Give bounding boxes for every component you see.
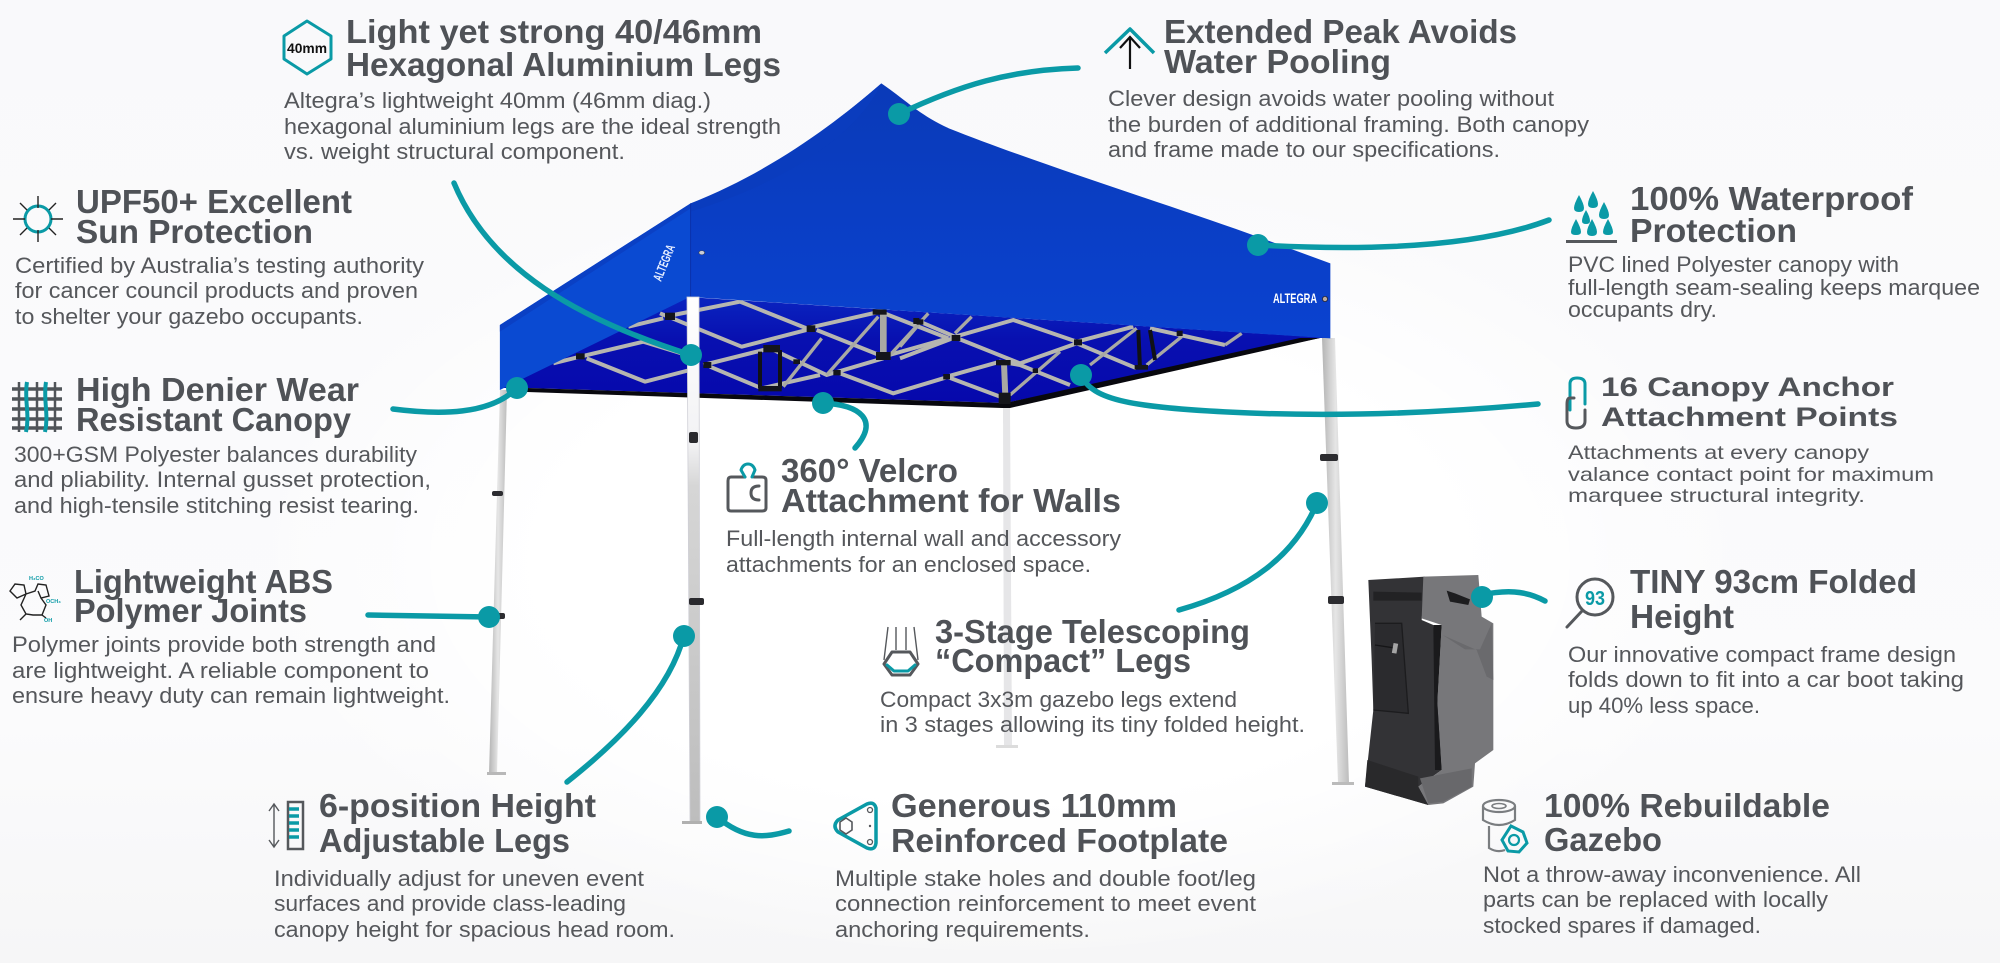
icon: 40mm hexagon bbox=[284, 21, 331, 74]
heading bbox=[1630, 563, 1917, 635]
body text: hexagonal aluminium legs are the ideal strength bbox=[284, 114, 781, 139]
body text bbox=[1108, 86, 1589, 162]
heading: Adjustable Legs bbox=[319, 822, 570, 859]
icon: bolt and nut bbox=[1483, 800, 1527, 852]
body text: occupants dry. bbox=[1568, 297, 1717, 322]
icon: footplate bbox=[835, 803, 876, 849]
heading: High Denier Wear bbox=[76, 371, 359, 408]
heading: 360° Velcro bbox=[781, 452, 958, 489]
heading: Polymer Joints bbox=[74, 592, 307, 629]
icon: 40mm hexagon: 40mm bbox=[287, 40, 327, 56]
body text bbox=[274, 866, 675, 942]
panel: polymer joints bbox=[10, 563, 450, 708]
panel: high denier canopy bbox=[12, 371, 431, 518]
icon: peak and arrow bbox=[1105, 29, 1154, 69]
eyelet right bbox=[1322, 296, 1328, 302]
heading: Water Pooling bbox=[1164, 43, 1391, 80]
peak shading bbox=[691, 83, 881, 212]
callout: velcro bbox=[812, 392, 866, 448]
body text bbox=[1483, 862, 1861, 938]
body text: 300+GSM Polyester balances durability bbox=[14, 442, 417, 467]
bag side pocket bbox=[1443, 623, 1493, 680]
aluminium scissor frame, left half bbox=[553, 302, 950, 393]
body text bbox=[880, 687, 1305, 737]
body text: are lightweight. A reliable component to bbox=[12, 658, 429, 683]
body text: connection reinforcement to meet event bbox=[835, 891, 1256, 916]
heading: Height bbox=[1630, 598, 1734, 635]
icon: woven fabric bbox=[12, 382, 62, 432]
gazebo front leg bbox=[682, 297, 704, 824]
heading bbox=[74, 563, 333, 629]
bag zip bbox=[1375, 645, 1397, 648]
body text: stocked spares if damaged. bbox=[1483, 913, 1761, 938]
icon: molecule: OH bbox=[44, 618, 52, 624]
icon: chain link bbox=[1567, 378, 1585, 428]
panel: rebuildable bbox=[1483, 787, 1861, 938]
body text: surfaces and provide class-leading bbox=[274, 891, 626, 916]
body text: the burden of additional framing. Both canopy bbox=[1108, 112, 1589, 137]
icon: molecule bbox=[10, 576, 61, 624]
body text: canopy height for spacious head room. bbox=[274, 917, 675, 942]
heading bbox=[781, 452, 1121, 519]
heading: Reinforced Footplate bbox=[891, 822, 1228, 859]
body text: attachments for an enclosed space. bbox=[726, 552, 1091, 577]
body text: vs. weight structural component. bbox=[284, 139, 625, 164]
body text: Polymer joints provide both strength and bbox=[12, 632, 436, 657]
body text: folds down to fit into a car boot taking bbox=[1568, 667, 1964, 692]
callout: folded height bbox=[1471, 586, 1545, 608]
heading: Light yet strong 40/46mm bbox=[346, 13, 762, 50]
body text: for cancer council products and proven bbox=[15, 278, 418, 303]
panel: waterproof bbox=[1566, 180, 1980, 322]
panel: footplate bbox=[835, 787, 1256, 942]
body text bbox=[726, 526, 1121, 577]
body text: in 3 stages allowing its tiny folded height. bbox=[880, 712, 1305, 737]
callout: footplate bbox=[706, 806, 789, 836]
heading: 100% Rebuildable bbox=[1544, 787, 1830, 824]
heading: Attachment for Walls bbox=[781, 482, 1121, 519]
panel: sun protection bbox=[13, 183, 424, 329]
panel: velcro bbox=[726, 452, 1121, 577]
icon: sun bbox=[13, 196, 63, 242]
heading: 16 Canopy Anchor bbox=[1601, 372, 1895, 402]
body text: and high-tensile stitching resist tearing. bbox=[14, 493, 419, 518]
icon: rain drops bbox=[1566, 191, 1617, 243]
heading bbox=[1630, 180, 1914, 249]
body text: Certified by Australia’s testing authority bbox=[15, 253, 424, 278]
heading bbox=[76, 371, 359, 438]
heading bbox=[1601, 372, 1898, 432]
heading bbox=[346, 13, 781, 83]
panel: canopy anchors bbox=[1567, 372, 1934, 507]
heading bbox=[1164, 13, 1517, 80]
heading: Hexagonal Aluminium Legs bbox=[346, 46, 781, 83]
body text: Compact 3x3m gazebo legs extend bbox=[880, 687, 1237, 712]
callout: peak bbox=[888, 68, 1078, 125]
heading: Resistant Canopy bbox=[76, 401, 352, 438]
left roof edge bbox=[500, 203, 691, 332]
body text: valance contact point for maximum bbox=[1568, 464, 1934, 486]
heading bbox=[891, 787, 1228, 859]
body text bbox=[1568, 252, 1980, 322]
callout: waterproof bbox=[1247, 220, 1549, 256]
callout: anchor points bbox=[1070, 364, 1538, 414]
gazebo canopy and frame bbox=[500, 83, 1330, 408]
corner seam bbox=[690, 203, 692, 297]
body text bbox=[835, 866, 1256, 942]
icon: magnifier 93 bbox=[1567, 579, 1613, 627]
body text bbox=[14, 442, 431, 518]
body text: full-length seam-sealing keeps marquee bbox=[1568, 275, 1980, 300]
heading: 6-position Height bbox=[319, 787, 596, 824]
body text: PVC lined Polyester canopy with bbox=[1568, 252, 1899, 277]
panel: height adjustable legs bbox=[269, 787, 675, 942]
body text: Full-length internal wall and accessory bbox=[726, 526, 1121, 551]
heading: TINY 93cm Folded bbox=[1630, 563, 1917, 600]
callout: height adjustable bbox=[567, 625, 695, 782]
body text bbox=[12, 632, 450, 708]
bag lower band bbox=[1365, 760, 1428, 805]
icon: telescoping leg bbox=[884, 627, 918, 675]
roof and valance bbox=[500, 83, 1330, 390]
body text: anchoring requirements. bbox=[835, 917, 1090, 942]
icon: magnifier 93: 93 bbox=[1585, 588, 1605, 610]
aluminium scissor frame, right half bbox=[900, 317, 1242, 404]
gazebo rear legs bbox=[487, 338, 1354, 785]
panel: hexagonal legs bbox=[284, 13, 781, 164]
panel: extended peak bbox=[1105, 13, 1589, 162]
icon: molecule: OCH₃ bbox=[46, 599, 61, 605]
panel: telescoping legs bbox=[880, 613, 1305, 737]
body text: ensure heavy duty can remain lightweight. bbox=[12, 683, 450, 708]
body text: and pliability. Internal gusset protection, bbox=[14, 467, 431, 492]
heading: Sun Protection bbox=[76, 213, 313, 250]
bag shadow stripe bbox=[1433, 625, 1442, 770]
bag pocket bbox=[1373, 623, 1408, 713]
icon: molecule: H₃CO bbox=[29, 576, 44, 582]
body text: Not a throw-away inconvenience. All bbox=[1483, 862, 1861, 887]
callout: polymer joints bbox=[368, 606, 500, 628]
body text bbox=[15, 253, 424, 329]
body text: Altegra’s lightweight 40mm (46mm diag.) bbox=[284, 88, 711, 113]
body text: marquee structural integrity. bbox=[1568, 485, 1865, 507]
heading: “Compact” Legs bbox=[935, 642, 1191, 679]
panel: folded height bbox=[1567, 563, 1964, 718]
heading: Extended Peak Avoids bbox=[1164, 13, 1517, 50]
eyelet left bbox=[699, 251, 705, 255]
body text: Clever design avoids water pooling without bbox=[1108, 86, 1554, 111]
left valance bbox=[500, 203, 691, 390]
canopy underside bbox=[500, 297, 1330, 403]
logo: Altegra left: ALTEGRA bbox=[650, 242, 678, 283]
bag strap bbox=[1373, 592, 1422, 601]
body text: Our innovative compact frame design bbox=[1568, 642, 1956, 667]
heading bbox=[76, 183, 352, 250]
heading: Lightweight ABS bbox=[74, 563, 333, 600]
body text: up 40% less space. bbox=[1568, 693, 1760, 718]
bag dark side bbox=[1365, 577, 1442, 805]
heading bbox=[319, 787, 596, 859]
callout: telescoping bbox=[1179, 492, 1328, 610]
heading: Attachment Points bbox=[1601, 402, 1898, 432]
heading: 100% Waterproof bbox=[1630, 180, 1914, 217]
body text: to shelter your gazebo occupants. bbox=[15, 304, 363, 329]
icon: ruler and arrow bbox=[269, 802, 303, 849]
body text: Individually adjust for uneven event bbox=[274, 866, 644, 891]
bag handle bbox=[1447, 591, 1470, 605]
body text: and frame made to our specifications. bbox=[1108, 137, 1500, 162]
logo: Altegra right: ALTEGRA bbox=[1273, 291, 1317, 306]
bag grey side bbox=[1418, 575, 1493, 805]
callout lines and dots bbox=[368, 68, 1549, 836]
heading: Gazebo bbox=[1544, 821, 1662, 858]
heading: Protection bbox=[1630, 212, 1797, 249]
carry bag bbox=[1365, 575, 1493, 805]
icon: puzzle piece bbox=[728, 464, 766, 511]
body text: parts can be replaced with locally bbox=[1483, 887, 1828, 912]
heading: 3-Stage Telescoping bbox=[935, 613, 1250, 650]
heading bbox=[1544, 787, 1830, 858]
heading: UPF50+ Excellent bbox=[76, 183, 352, 220]
callout: hexagonal legs bbox=[454, 183, 702, 366]
front valance and roof panel bbox=[691, 83, 1330, 338]
black hem bbox=[527, 338, 1320, 408]
body text bbox=[1568, 442, 1934, 507]
body text bbox=[1568, 642, 1964, 718]
heading bbox=[935, 613, 1250, 679]
body text bbox=[284, 88, 781, 164]
heading: Generous 110mm bbox=[891, 787, 1177, 824]
body text: Attachments at every canopy bbox=[1568, 442, 1869, 464]
body text: Multiple stake holes and double foot/leg bbox=[835, 866, 1256, 891]
callout: denier canopy bbox=[393, 377, 528, 412]
